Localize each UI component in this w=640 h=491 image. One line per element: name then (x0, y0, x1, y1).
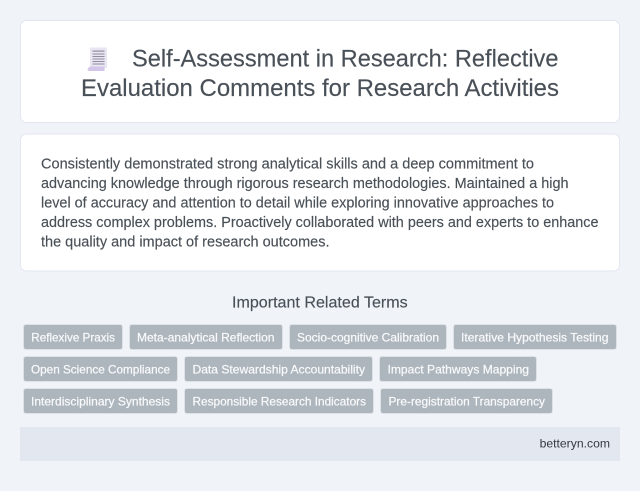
tag: Pre-registration Transparency (388, 394, 545, 408)
tag: Open Science Compliance (31, 362, 170, 376)
tag (184, 356, 372, 382)
tag (130, 324, 282, 350)
summary paragraph: level of accuracy and attention to detail while exploring innovative approaches to (41, 195, 554, 211)
heading: important related terms: Important Related Terms (232, 294, 408, 311)
tag: Reflexive Praxis (31, 330, 115, 344)
icon: document scroll (88, 48, 107, 71)
summary paragraph: the quality and impact of research outcomes. (41, 234, 330, 250)
summary paragraph: advancing knowledge through rigorous research methodologies. Maintained a high (41, 176, 568, 192)
title text (81, 46, 559, 102)
tag: Iterative Hypothesis Testing (461, 330, 608, 344)
tag: Impact Pathways Mapping (388, 362, 529, 376)
tag (24, 388, 178, 414)
tag: Meta-analytical Reflection (137, 330, 274, 344)
summary paragraph (41, 156, 598, 250)
tag (454, 324, 616, 350)
tag: Data Stewardship Accountability (192, 362, 365, 376)
footer site name: betteryn.com (540, 437, 610, 451)
title text: Evaluation Comments for Research Activities (81, 75, 559, 102)
tag (380, 356, 536, 382)
tag: Socio-cognitive Calibration (297, 330, 439, 344)
tag (184, 388, 374, 414)
tag (380, 388, 552, 414)
tag (24, 324, 122, 350)
summary paragraph: Consistently demonstrated strong analytical skills and a deep commitment to (41, 156, 534, 172)
tag (290, 324, 446, 350)
summary paragraph: address complex problems. Proactively collaborated with peers and experts to enhance (41, 215, 598, 231)
panel: evaluation summary (20, 134, 620, 271)
term tags (24, 324, 616, 414)
tag: Interdisciplinary Synthesis (31, 394, 170, 408)
footer bar (20, 427, 620, 461)
tag (24, 356, 178, 382)
panel: title header (20, 20, 620, 122)
title text: Self-Assessment in Research: Reflective (132, 46, 558, 73)
tag: Responsible Research Indicators (192, 394, 366, 408)
